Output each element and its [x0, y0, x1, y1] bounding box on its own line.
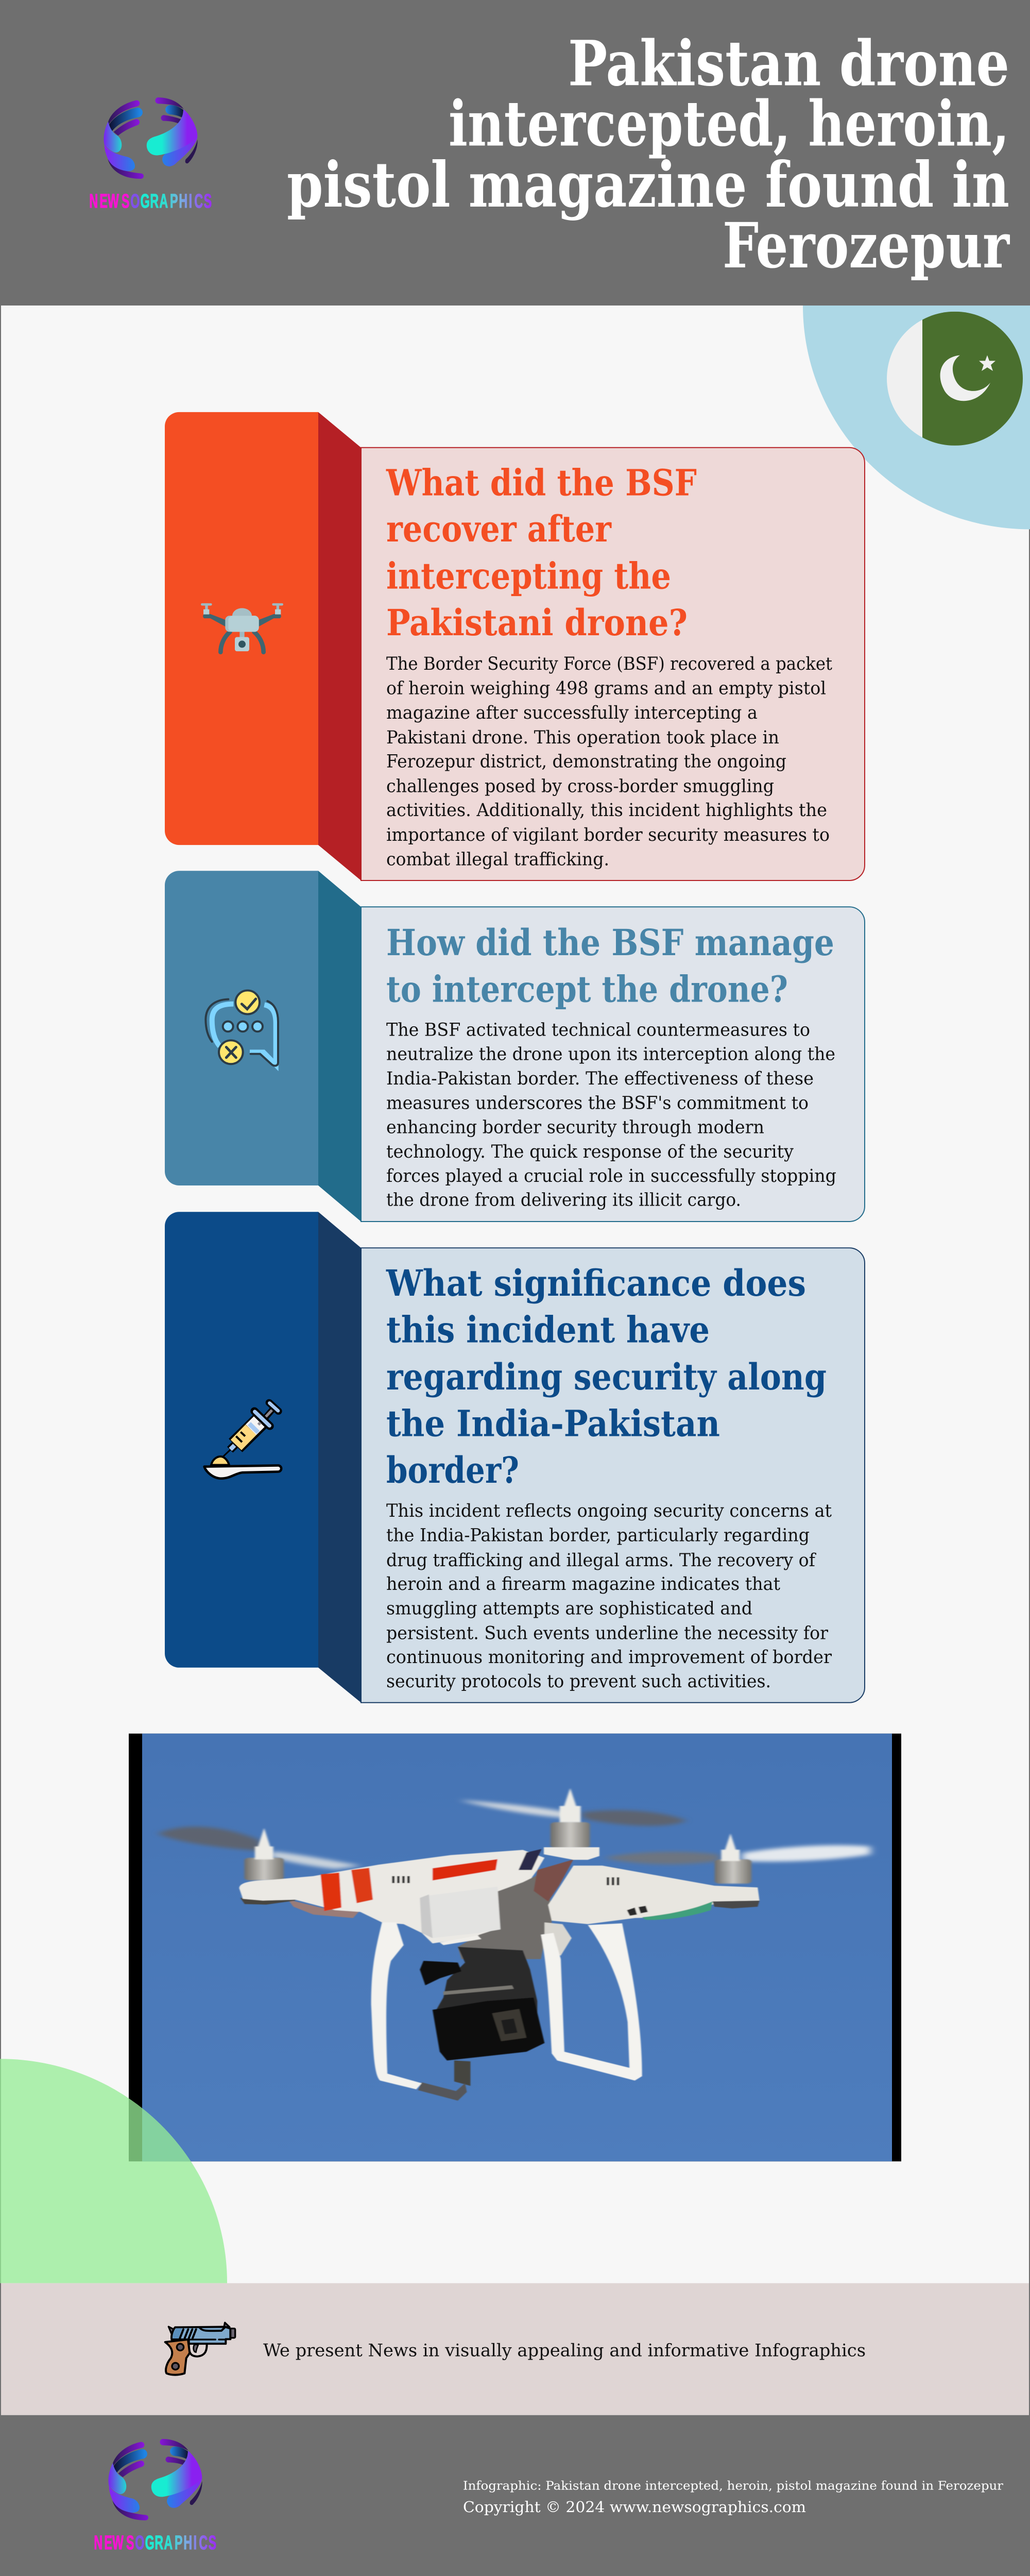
photo: quadcopter drone against blue sky — [129, 1734, 901, 2161]
heading — [386, 1262, 827, 1492]
heading: intercepting the — [386, 555, 671, 598]
panel: what did the BSF recover — [165, 412, 865, 880]
heading: recover after — [386, 508, 612, 550]
body text: technology. The quick response of the security — [386, 1142, 794, 1162]
panel: how did the BSF intercept — [165, 871, 865, 1222]
tagline text: We present News in visually appealing and informative Infographics — [263, 2341, 866, 2360]
tagline band — [1, 2283, 1029, 2415]
decorative blue circle — [803, 306, 1030, 530]
heading: this incident have — [386, 1309, 710, 1351]
colour tab with fold — [165, 1212, 361, 1703]
logo: Newsographics header: NEWSOGRAPHICS — [89, 190, 212, 212]
content card — [361, 448, 865, 880]
body text: Pakistani drone. This operation took place in — [386, 727, 779, 748]
footer credits: Copyright © 2024 www.newsographics.com — [463, 2498, 806, 2516]
logo: Newsographics footer: NEWSOGRAPHICS — [94, 2531, 216, 2554]
body text: combat illegal trafficking. — [386, 850, 609, 870]
heading: to intercept the drone? — [386, 968, 788, 1010]
heading: Pakistani drone? — [386, 602, 688, 644]
body text: importance of vigilant border security measures to — [386, 825, 830, 845]
body text: smuggling attempts are sophisticated and — [386, 1599, 752, 1619]
body text: challenges posed by cross-border smuggling — [386, 776, 774, 797]
heading: What did the BSF — [386, 462, 697, 504]
colour tab with fold — [165, 412, 361, 880]
body text: measures underscores the BSF's commitment to — [386, 1093, 809, 1113]
header band — [0, 0, 1030, 306]
body text: neutralize the drone upon its interception along the — [386, 1044, 835, 1065]
content card — [361, 907, 865, 1222]
heading — [386, 921, 834, 1010]
colour tab with fold — [165, 871, 361, 1222]
heading: How did the BSF manage — [386, 921, 834, 964]
logo: Newsographics header — [89, 97, 212, 212]
body text: persistent. Such events underline the necessity for — [386, 1623, 828, 1644]
body text: Ferozepur district, demonstrating the ongoing — [386, 752, 786, 772]
body text: enhancing border security through modern — [386, 1117, 764, 1138]
body text: This incident reflects ongoing security concerns at — [386, 1501, 832, 1521]
heading: What significance does — [386, 1262, 806, 1304]
heading: the India-Pakistan — [386, 1402, 720, 1445]
body text — [386, 654, 832, 870]
body text: The BSF activated technical countermeasures to — [386, 1020, 810, 1040]
body text: heroin and a firearm magazine indicates that — [386, 1574, 780, 1595]
decorative green circle — [0, 2059, 227, 2283]
icon: Pakistan flag — [887, 312, 1023, 446]
heading: border? — [386, 1449, 519, 1492]
body text: of heroin weighing 498 grams and an empty pistol — [386, 679, 826, 699]
body text: drug trafficking and illegal arms. The recovery of — [386, 1550, 816, 1571]
body text: magazine after successfully intercepting a — [386, 703, 758, 723]
body text: the drone from delivering its illicit cargo. — [386, 1190, 741, 1210]
body text — [386, 1020, 836, 1210]
body text: forces played a crucial role in successfully stopping — [386, 1166, 836, 1187]
footer credits — [463, 2479, 1004, 2516]
body text: The Border Security Force (BSF) recovered a packet — [386, 654, 832, 674]
content card — [361, 1248, 865, 1703]
body text: security protocols to prevent such activities. — [386, 1671, 771, 1692]
body text: the India-Pakistan border, particularly regarding — [386, 1526, 810, 1546]
title — [287, 26, 1010, 282]
footer band — [0, 2415, 1030, 2576]
icon: pistol — [165, 2323, 235, 2375]
heading: regarding security along — [386, 1356, 827, 1398]
footer credits: Infographic: Pakistan drone intercepted, heroin, pistol magazine found in Ferozepur — [463, 2479, 1004, 2493]
body text: activities. Additionally, this incident highlights the — [386, 800, 827, 821]
body text — [386, 1501, 832, 1692]
body text: continuous monitoring and improvement of border — [386, 1647, 832, 1668]
icon: syringe and spoon — [204, 1403, 281, 1479]
logo: Newsographics footer — [94, 2439, 216, 2554]
icon: chat with check and cross — [205, 990, 278, 1066]
icon: drone — [201, 603, 283, 652]
panel: significance of the incident — [165, 1212, 865, 1703]
heading — [386, 462, 697, 644]
body text: India-Pakistan border. The effectiveness of these — [386, 1069, 814, 1089]
